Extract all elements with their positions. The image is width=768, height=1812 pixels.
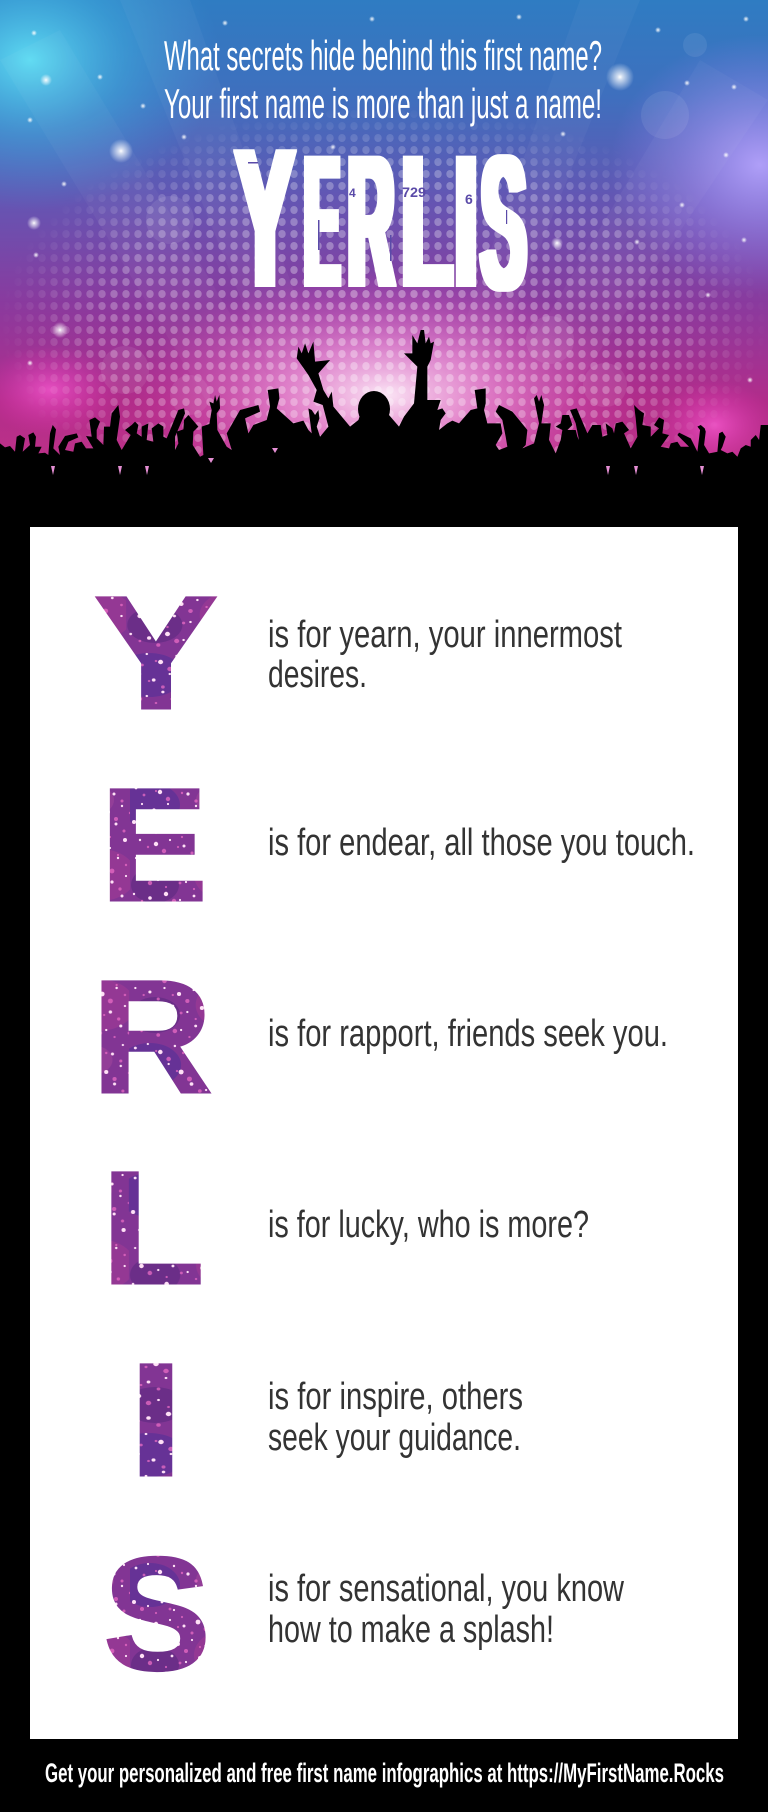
bokeh circles [101, 33, 707, 415]
title distress marks: 4 [349, 186, 356, 200]
letter R: R [92, 947, 212, 1126]
name title: S [481, 116, 526, 330]
title distress marks [248, 162, 507, 261]
name title: L [401, 116, 453, 326]
title distress marks: 729 [402, 184, 426, 200]
text S [268, 1568, 624, 1651]
name title: Y [236, 109, 294, 329]
row L [102, 1138, 589, 1317]
text I: seek your guidance. [268, 1417, 521, 1459]
row R [92, 947, 668, 1126]
text Y: is for yearn, your innermost [268, 614, 622, 656]
letter I: I [128, 1331, 184, 1509]
crowd silhouette [0, 330, 768, 490]
text S: how to make a splash! [268, 1609, 554, 1651]
text I [268, 1376, 523, 1459]
text Y: desires. [268, 654, 367, 696]
row S [104, 1524, 624, 1703]
letter S: S [104, 1524, 210, 1703]
sparkle stars [27, 14, 753, 383]
light rays [0, 0, 768, 440]
name title: E [304, 117, 340, 327]
dot matrix [18, 115, 750, 454]
header stage background [0, 0, 768, 520]
name title: R [348, 116, 394, 326]
name title: I [454, 118, 478, 327]
row I [128, 1331, 523, 1509]
text L: is for lucky, who is more? [268, 1204, 589, 1246]
letter Y: Y [95, 563, 217, 742]
row Y [95, 563, 622, 742]
row E [101, 755, 695, 934]
stage glow [0, 280, 761, 456]
text I: is for inspire, others [268, 1376, 523, 1418]
name title [236, 109, 526, 330]
text S: is for sensational, you know [268, 1568, 624, 1610]
crowd light gaps [51, 448, 704, 475]
letter E: E [101, 755, 207, 934]
letter L: L [102, 1138, 204, 1317]
text Y [268, 614, 622, 696]
title distress marks: 6 [465, 191, 473, 207]
header tagline [164, 32, 602, 127]
white content panel [30, 527, 738, 1739]
